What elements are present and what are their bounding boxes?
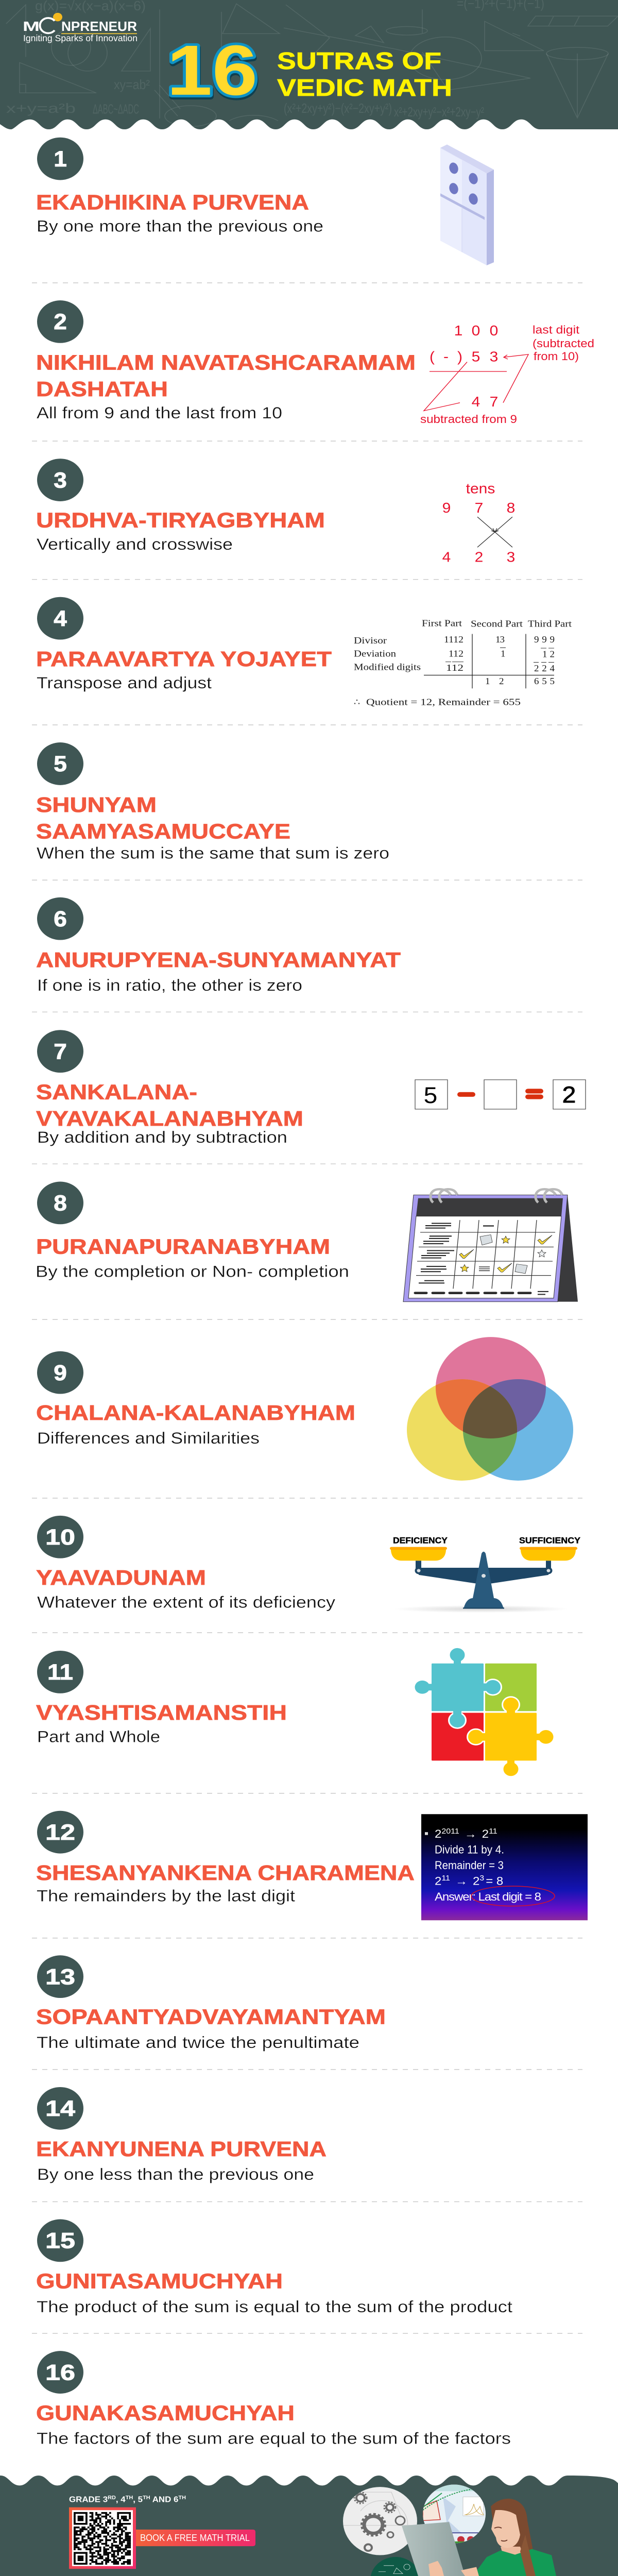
- grade label: RD: [108, 2495, 116, 2501]
- logo: [23, 13, 138, 43]
- panel: sutra 7: [36, 1030, 586, 1146]
- number badge 8: 8: [54, 1191, 67, 1215]
- call to action button: [136, 2530, 255, 2546]
- diagram: division table: Quotient = 12, Remainder = 655: [366, 697, 521, 707]
- heading 9: CHALANA-KALANABYHAM: [36, 1401, 355, 1425]
- number badge 10: [37, 1516, 83, 1558]
- diagram: subtraction from 100: last digit: [533, 323, 580, 336]
- title text: [277, 48, 452, 101]
- diagram: division table: Divisor: [354, 636, 387, 646]
- title text: VEDIC MATH: [277, 75, 452, 101]
- slide: last digit example: →: [455, 1874, 468, 1887]
- panel: sutra 2: [36, 300, 594, 426]
- panel: sutra 1: [36, 138, 494, 265]
- title text: SUTRAS OF: [277, 48, 441, 74]
- number badge 14: 14: [45, 2097, 75, 2121]
- diagram: subtraction from 100: -: [443, 349, 449, 365]
- slide: last digit example: Answer: Last digit = 8: [435, 1890, 541, 1903]
- diagram: division table: Modified digits: [354, 662, 421, 672]
- number badge 1: [37, 138, 83, 180]
- number badge 4: [37, 597, 83, 639]
- diagram: subtraction from 100: 0: [490, 323, 498, 339]
- heading 6: ANURUPYENA-SUNYAMANYAT: [36, 948, 401, 972]
- diagram: division table: 999: [534, 635, 555, 645]
- panel: sutra 6: [36, 897, 401, 994]
- diagram: vertically and crosswise: 7: [475, 500, 483, 516]
- number badge 15: [37, 2219, 83, 2262]
- slide: last digit example: [421, 1814, 588, 1920]
- slide: last digit example: 11: [441, 1874, 450, 1883]
- title number 16: 16: [167, 30, 258, 110]
- diagram: subtraction from 100: [420, 323, 594, 426]
- number badge 5: 5: [54, 752, 67, 776]
- panel: sutra 4: [36, 597, 572, 707]
- heading 13: SOPAANTYADVAYAMANTYAM: [36, 2005, 386, 2028]
- heading 7: SANKALANA-: [36, 1080, 197, 1104]
- heading 10: YAAVADUNAM: [36, 1566, 206, 1589]
- panel: sutra 5: [36, 742, 389, 862]
- slide: last digit example: 11: [489, 1827, 497, 1836]
- footer banner: [0, 2476, 618, 2576]
- description 8: By the completion or Non- completion: [36, 1262, 349, 1280]
- diagram: 5 minus blank equals 2: 2: [562, 1082, 576, 1108]
- number badge 3: 3: [54, 468, 67, 493]
- number badge 8: [37, 1182, 83, 1224]
- diagram: division table: 1112: [444, 635, 464, 645]
- description 9: Differences and Similarities: [37, 1429, 260, 1447]
- description 5: When the sum is the same that sum is zero: [37, 844, 389, 862]
- diagram: division table: 13: [495, 635, 505, 645]
- description 16: The factors of the sum are equal to the sum of the factors: [37, 2429, 511, 2447]
- grade label: AND 6: [150, 2495, 178, 2504]
- heading 2: [36, 351, 416, 400]
- diagram: division table: ∴: [354, 697, 360, 707]
- number badge 14: [37, 2087, 83, 2130]
- chart: venn diagram: [407, 1337, 573, 1481]
- illustration: girl with tablet: [402, 2499, 556, 2576]
- diagram: subtraction from 100: ): [457, 349, 462, 365]
- description 15: The product of the sum is equal to the sum of the product: [37, 2297, 512, 2315]
- icon: jigsaw puzzle: [415, 1648, 553, 1776]
- chalk math doodles: x+y=a²b: [6, 101, 76, 116]
- number badge 7: 7: [54, 1040, 67, 1064]
- slide: last digit example: = 8: [486, 1874, 503, 1887]
- panel: sutra 12: [36, 1811, 588, 1920]
- diagram: division table: 12: [542, 649, 555, 659]
- diagram: subtraction from 100: 7: [490, 394, 498, 410]
- heading 16: GUNAKASAMUCHYAH: [36, 2401, 295, 2425]
- panel: sutra 8: [36, 1182, 578, 1302]
- chalk math doodles: x²+2xy+y²−x²+2xy−y²: [394, 105, 484, 120]
- icon: balance scale: SUFFICIENCY: [519, 1535, 580, 1546]
- diagram: vertically and crosswise: 8: [507, 500, 515, 516]
- diagram: division table: Third Part: [528, 619, 572, 629]
- description 7: By addition and by subtraction: [37, 1128, 287, 1146]
- heading 4: PARAAVARTYA YOJAYET: [36, 648, 332, 671]
- diagram: subtraction from 100: 0: [472, 323, 480, 339]
- logo: NPRENEUR: [61, 19, 137, 34]
- heading 7: VYAVAKALANABHYAM: [36, 1107, 303, 1130]
- description 3: Vertically and crosswise: [37, 535, 233, 553]
- diagram: division table: 224: [534, 664, 555, 673]
- heading 11: VYASHTISAMANSTIH: [36, 1701, 287, 1724]
- heading 12: SHESANYANKENA CHARAMENA: [36, 1861, 415, 1885]
- panel: sutra 15: [36, 2219, 512, 2315]
- heading 7: [36, 1080, 303, 1130]
- number badge 16: [37, 2351, 83, 2394]
- footer background: [0, 2476, 618, 2576]
- panel: sutra 16: [36, 2351, 511, 2447]
- diagram: 5 minus blank equals 2: 5: [424, 1082, 437, 1108]
- number badge 5: [37, 742, 83, 785]
- diagram: division table: 112: [449, 649, 464, 658]
- diagram: vertically and crosswise: 9: [442, 500, 451, 516]
- description 6: If one is in ratio, the other is zero: [37, 976, 302, 994]
- description 10: Whatever the extent of its deficiency: [37, 1593, 336, 1611]
- heading 14: EKANYUNENA PURVENA: [36, 2138, 327, 2161]
- panel: sutra 3: [36, 459, 515, 565]
- diagram: vertically and crosswise: 4: [442, 550, 451, 565]
- diagram: subtraction from 100: (subtracted: [533, 337, 594, 350]
- number badge 11: 11: [47, 1660, 73, 1685]
- grade label: , 4: [116, 2495, 126, 2504]
- number badge 3: [37, 459, 83, 501]
- panel: sutra 14: [36, 2087, 327, 2183]
- diagram: division table: Second Part: [471, 619, 523, 629]
- chalk math doodles: [6, 0, 618, 127]
- slide: last digit example: 2: [435, 1827, 441, 1840]
- slide: last digit example: Remainder = 3: [435, 1859, 504, 1872]
- heading 5: [36, 793, 290, 843]
- grade label: TH: [126, 2495, 133, 2501]
- panel: sutra 10: [36, 1516, 580, 1613]
- heading 1: EKADHIKINA PURVENA: [36, 191, 309, 214]
- panel: sutra 13: [36, 1955, 386, 2052]
- number badge 6: 6: [54, 907, 67, 931]
- heading 2: DASHATAH: [36, 377, 168, 400]
- diagram: subtraction from 100: (: [430, 349, 435, 365]
- number badge 10: 10: [45, 1526, 75, 1550]
- diagram: division table: Deviation: [354, 649, 396, 658]
- description 4: Transpose and adjust: [37, 673, 212, 692]
- logo: Igniting Sparks of Innovation: [23, 33, 138, 43]
- diagram: subtraction from 100: 5: [472, 349, 480, 365]
- number badge 2: 2: [54, 310, 67, 334]
- diagram: subtraction from 100: 4: [472, 394, 480, 410]
- icon: balance scale: DEFICIENCY: [393, 1535, 448, 1546]
- number badge 2: [37, 300, 83, 343]
- diagram: 5 minus blank equals 2: [415, 1080, 586, 1109]
- diagram: division table: 2: [499, 676, 504, 686]
- circle: gears: [343, 2487, 417, 2555]
- chalk math doodles: (x²+2xy+y²)−(x²−2xy+y²): [284, 101, 392, 116]
- heading 3: URDHVA-TIRYAGBYHAM: [36, 509, 325, 532]
- number badge 13: 13: [45, 1965, 75, 1989]
- number badge 12: 12: [45, 1821, 75, 1844]
- circle: green chalkboard: [371, 2557, 420, 2576]
- slide: last digit example: 2: [482, 1827, 489, 1840]
- diagram: division table: 1: [501, 649, 505, 658]
- diagram: subtraction from 100: 1: [454, 323, 462, 339]
- heading 15: GUNITASAMUCHYAH: [36, 2269, 283, 2293]
- description 1: By one more than the previous one: [37, 217, 323, 235]
- diagram: vertically and crosswise: 3: [507, 550, 515, 565]
- number badge 16: 16: [45, 2361, 75, 2385]
- description 14: By one less than the previous one: [37, 2165, 314, 2183]
- slide: last digit example: 2011: [441, 1827, 459, 1836]
- title number 16: 16: [167, 32, 258, 112]
- slide: last digit example: →: [465, 1827, 477, 1840]
- number badge 11: [37, 1651, 83, 1693]
- grade label: GRADE 3: [69, 2495, 108, 2504]
- grade label: TH: [178, 2495, 186, 2501]
- diagram: division table: 655: [534, 676, 555, 686]
- QR code: [69, 2507, 136, 2569]
- number badge 9: [37, 1351, 83, 1394]
- logo: M: [23, 19, 40, 34]
- number badge 7: [37, 1030, 83, 1073]
- diagram: vertically and crosswise: tens: [466, 481, 495, 497]
- number badge 4: 4: [54, 606, 67, 631]
- icon: domino: [440, 144, 494, 265]
- heading 5: SAAMYASAMUCCAYE: [36, 820, 290, 843]
- grade label: TH: [143, 2495, 150, 2501]
- description 12: The remainders by the last digit: [37, 1887, 295, 1905]
- chalk math doodles: ΔABC~ΔADC: [93, 102, 139, 116]
- description 11: Part and Whole: [37, 1727, 160, 1745]
- chalk math doodles: xy=ab²: [114, 77, 150, 92]
- diagram: subtraction from 100: 3: [490, 349, 498, 365]
- diagram: division table: 112: [446, 663, 464, 673]
- diagram: division table: First Part: [422, 618, 462, 629]
- header banner: [0, 0, 618, 129]
- diagram: subtraction from 100: from 10): [534, 350, 579, 363]
- number badge 15: 15: [45, 2229, 75, 2253]
- diagram: vertically and crosswise: [442, 481, 515, 565]
- number badge 6: [37, 897, 83, 940]
- description 13: The ultimate and twice the penultimate: [37, 2033, 359, 2052]
- circle: charts: [423, 2485, 486, 2545]
- number badge 12: [37, 1811, 83, 1854]
- number badge 13: [37, 1955, 83, 1998]
- panel: sutra 9: [36, 1337, 573, 1481]
- diagram: division table: 1: [485, 676, 490, 686]
- diagram: vertically and crosswise: 2: [475, 550, 483, 565]
- heading 5: SHUNYAM: [36, 793, 157, 817]
- slide: last digit example: 3: [479, 1874, 484, 1883]
- description 2: All from 9 and the last from 10: [37, 403, 282, 422]
- chalkboard background: [0, 0, 618, 129]
- number badge 9: 9: [54, 1361, 67, 1385]
- slide: last digit example: 2: [473, 1874, 479, 1887]
- diagram: subtraction from 100: subtracted from 9: [420, 413, 517, 426]
- diagram: division table: [354, 618, 572, 707]
- panel: sutra 11: [36, 1648, 553, 1776]
- slide: last digit example: 2: [435, 1874, 441, 1887]
- call to action button: BOOK A FREE MATH TRIAL: [140, 2533, 250, 2544]
- grade label: , 5: [133, 2495, 143, 2504]
- heading 8: PURANAPURANABYHAM: [36, 1235, 330, 1258]
- heading 2: NIKHILAM NAVATASHCARAMAM: [36, 351, 416, 374]
- slide: last digit example: Divide 11 by 4.: [435, 1843, 504, 1856]
- icon: desk calendar: [403, 1189, 578, 1302]
- icon: balance scale: [390, 1535, 580, 1613]
- number badge 1: 1: [54, 147, 67, 171]
